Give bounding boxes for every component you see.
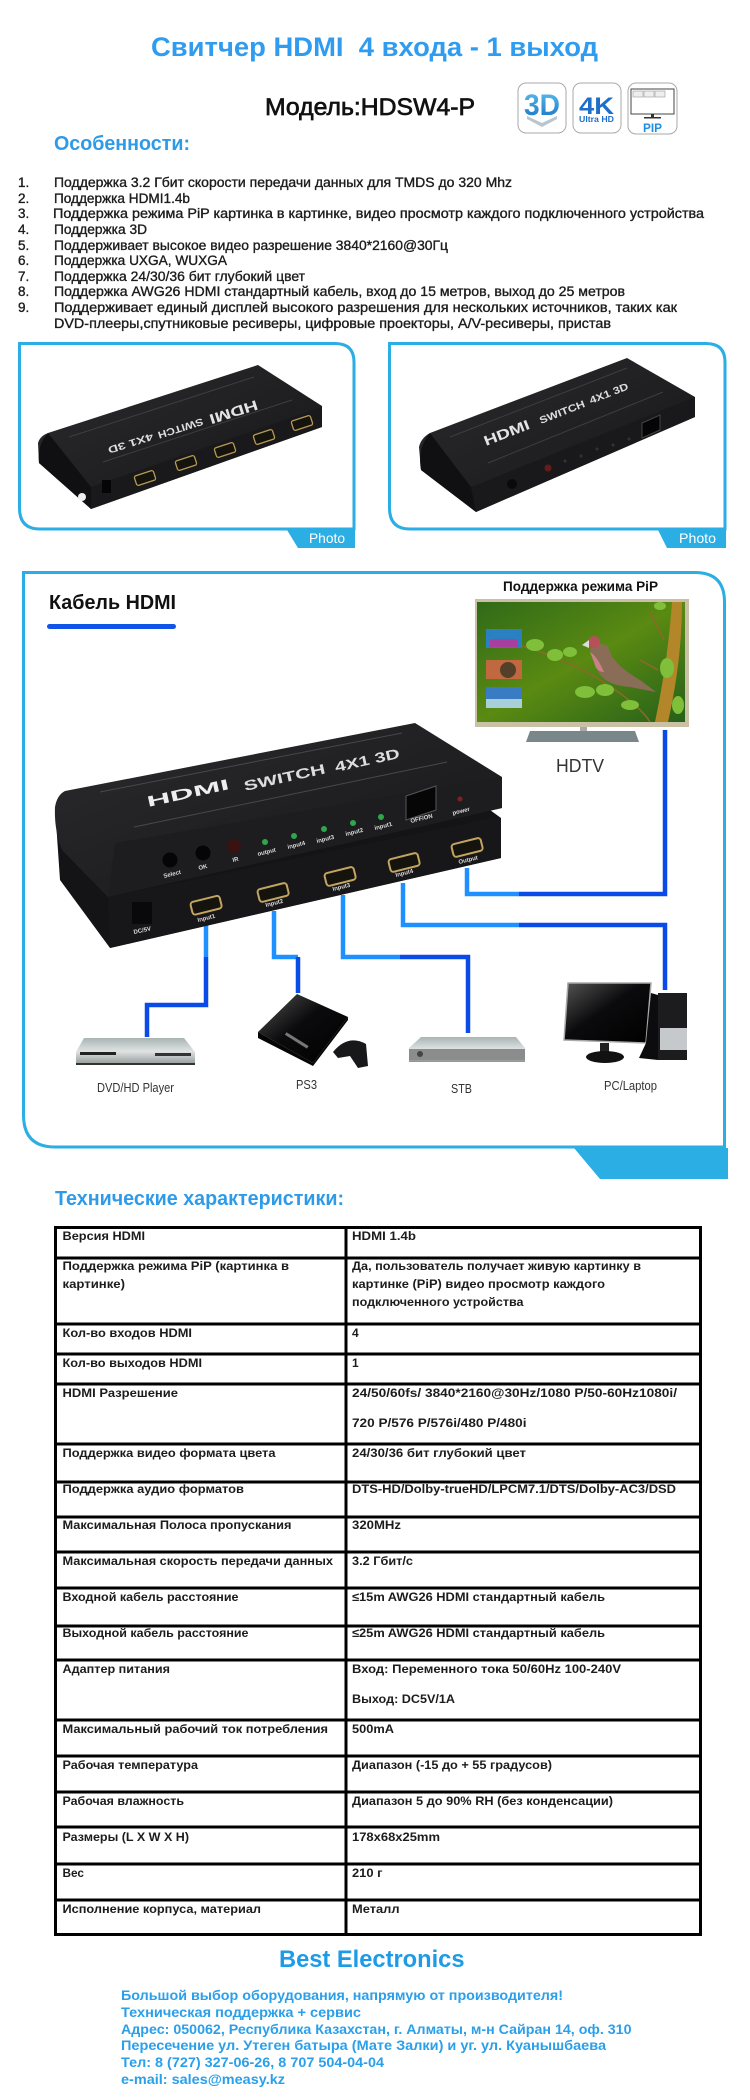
icon: 3D: 3D bbox=[524, 89, 560, 122]
cables bbox=[147, 730, 665, 1037]
upper unit: Select bbox=[163, 870, 182, 880]
heading: specifications: Технические характеристики: bbox=[55, 1188, 344, 1210]
upper unit: input2 bbox=[345, 828, 365, 838]
table text: parameters: Максимальная Полоса пропускания bbox=[62, 1518, 292, 1532]
table text: parameters: Размеры (L X W X H) bbox=[62, 1830, 189, 1844]
table text: values: 178x68x25mm bbox=[352, 1830, 440, 1844]
lower unit: Input3 bbox=[332, 883, 352, 893]
label: DVD/HD Player: DVD/HD Player bbox=[97, 1080, 175, 1095]
photo: switch rear: SWITCH bbox=[156, 415, 204, 440]
icon: PIP: PIP bbox=[643, 123, 662, 135]
table text: parameters: Кол-во выходов HDMI bbox=[62, 1356, 202, 1370]
table text: parameters: Выходной кабель расстояние bbox=[62, 1626, 249, 1640]
tab: photo 1 label bbox=[287, 530, 355, 548]
features list: Поддерживает единый дисплей высокого разрешения для нескольких источников, таких как bbox=[54, 300, 677, 315]
features list: 8. bbox=[18, 284, 29, 299]
label: HDTV: HDTV bbox=[556, 756, 604, 776]
model number: Модель:HDSW4-P bbox=[265, 94, 475, 121]
icon: 3D bbox=[518, 83, 566, 133]
upper unit: HDMI bbox=[145, 776, 231, 811]
table text: values: 500mA bbox=[352, 1722, 394, 1736]
table text: values: Диапазон (-15 до + 55 градусов) bbox=[352, 1758, 552, 1772]
features list: Поддержка 24/30/36 бит глубокий цвет bbox=[54, 269, 305, 284]
photo: switch front: 4X1 3D bbox=[588, 382, 630, 407]
table text: parameters: Поддержка аудио форматов bbox=[62, 1482, 244, 1496]
table text: parameters: картинке) bbox=[62, 1277, 125, 1291]
table text: values bbox=[352, 1229, 678, 1916]
table text: values: DTS-HD/Dolby-trueHD/LPCM7.1/DTS/Dolby-AC3/DSD bbox=[352, 1482, 676, 1496]
specifications table bbox=[55, 1227, 701, 1935]
features list: Поддержка HDMI1.4b bbox=[54, 191, 190, 206]
icon: PIP bbox=[628, 83, 677, 135]
features list: Поддержка AWG26 HDMI стандартный кабель, вход до 15 метров, выход до 25 метров bbox=[54, 284, 625, 299]
table text: values: 720 P/576 P/576i/480 P/480i bbox=[352, 1416, 526, 1430]
table text: values: 24/50/60fs/ 3840*2160@30Hz/1080 P/50-60Hz1080i/ bbox=[352, 1386, 678, 1400]
heading: HDMI cable: Кабель HDMI bbox=[49, 592, 176, 614]
table text: parameters: Входной кабель расстояние bbox=[62, 1590, 239, 1604]
table text: values: HDMI 1.4b bbox=[352, 1229, 416, 1243]
table text: values: 4 bbox=[352, 1326, 359, 1340]
table text: parameters: Максимальный рабочий ток потребления bbox=[62, 1722, 328, 1736]
lower unit: Input4 bbox=[395, 869, 415, 879]
table text: parameters: Максимальная скорость передачи данных bbox=[62, 1554, 333, 1568]
upper unit: input3 bbox=[316, 835, 336, 845]
table text: values: Вход: Переменного тока 50/60Hz 100-240V bbox=[352, 1662, 621, 1676]
features list: Поддержка 3.2 Гбит скорости передачи данных для TMDS до 320 Mhz bbox=[54, 175, 512, 190]
icon: TV bbox=[475, 599, 689, 742]
device: DVD player bbox=[76, 1038, 195, 1065]
table text: parameters: Поддержка режима PiP (картинка в bbox=[62, 1259, 289, 1273]
features list: 5. bbox=[18, 238, 29, 253]
tab: photo 2 label: Photo bbox=[679, 530, 716, 546]
footer contact details: e-mail: sales@measy.kz bbox=[121, 2072, 285, 2087]
heading: features: Особенности: bbox=[54, 133, 190, 155]
table text: values: картинке (PiP) видео просмотр каждого bbox=[352, 1277, 605, 1291]
panel: photo 1 bbox=[20, 344, 355, 548]
table text: values: Выход: DC5V/1A bbox=[352, 1692, 455, 1706]
upper unit: input1 bbox=[374, 822, 394, 832]
photo: switch rear: HDMI bbox=[207, 397, 260, 428]
features list: Поддержка режима PiP картинка в картинке, видео просмотр каждого подключенного устройства bbox=[53, 206, 705, 221]
footer contact details: Адрес: 050062, Республика Казахстан, г. Алматы, м-н Сайран 14, оф. 310 bbox=[121, 2022, 632, 2037]
upper unit: OK bbox=[198, 864, 209, 872]
table text: parameters bbox=[62, 1229, 333, 1916]
panel: photo 2 bbox=[390, 344, 726, 548]
table text: values: Да, пользователь получает живую картинку в bbox=[352, 1259, 641, 1273]
title: Свитчер HDMI 4 входа - 1 выход bbox=[151, 32, 598, 62]
table text: parameters: Адаптер питания bbox=[62, 1662, 170, 1676]
PiP caption: Поддержка режима PiP bbox=[503, 579, 658, 594]
footer heading: Best Electronics bbox=[279, 1946, 464, 1973]
photo: switch front bbox=[419, 358, 695, 512]
lower unit: Input2 bbox=[265, 899, 285, 909]
table text: values: ≤15m AWG26 HDMI стандартный кабель bbox=[352, 1590, 605, 1604]
features list: 3. bbox=[18, 206, 29, 221]
features list: Поддерживает высокое видео разрешение 3840*2160@30Гц bbox=[54, 238, 448, 253]
lower unit: Input1 bbox=[197, 914, 217, 924]
lower unit bbox=[108, 817, 501, 948]
features list bbox=[18, 175, 705, 331]
table text: parameters: Кол-во входов HDMI bbox=[62, 1326, 192, 1340]
table text: values: 24/30/36 бит глубокий цвет bbox=[352, 1446, 526, 1460]
table text: parameters: Версия HDMI bbox=[62, 1229, 145, 1243]
features list: 6. bbox=[18, 253, 29, 268]
table text: values: Металл bbox=[352, 1902, 400, 1916]
device: HDMI switch bbox=[55, 723, 502, 948]
tab: diagram corner bbox=[574, 1148, 728, 1179]
features list: 9. bbox=[18, 300, 29, 315]
icon: 4K Ultra HD: Ultra HD bbox=[579, 114, 614, 124]
table text: parameters: Поддержка видео формата цвета bbox=[62, 1446, 276, 1460]
photo: switch front: SWITCH bbox=[538, 399, 587, 427]
features list: Поддержка 3D bbox=[54, 222, 147, 237]
table text: values: 1 bbox=[352, 1356, 359, 1370]
features list: 1. bbox=[18, 175, 29, 190]
tab: photo 1 label: Photo bbox=[309, 530, 345, 546]
footer contact details: Пересечение ул. Утеген батыра (Мате Залки) и уг. ул. Куанышбаева bbox=[121, 2038, 607, 2053]
table text: parameters: Рабочая температура bbox=[62, 1758, 198, 1772]
features list: 7. bbox=[18, 269, 29, 284]
panel: connection diagram bbox=[24, 572, 728, 1179]
lower unit: Output bbox=[458, 855, 479, 866]
photo: switch rear bbox=[38, 365, 322, 509]
device: PS3 console bbox=[258, 994, 368, 1068]
table text: parameters: HDMI Разрешение bbox=[62, 1386, 178, 1400]
footer contact details bbox=[121, 1988, 632, 2087]
features list: 2. bbox=[18, 191, 29, 206]
table text: values: 320MHz bbox=[352, 1518, 401, 1532]
table text: values: ≤25m AWG26 HDMI стандартный кабель bbox=[352, 1626, 605, 1640]
upper unit bbox=[55, 723, 502, 897]
upper unit: output bbox=[257, 848, 277, 858]
footer contact details: Тел: 8 (727) 327-06-26, 8 707 504-04-04 bbox=[121, 2055, 385, 2070]
upper unit: input4 bbox=[287, 841, 307, 851]
table text: values: подключенного устройства bbox=[352, 1295, 524, 1309]
label: PC/Laptop: PC/Laptop bbox=[604, 1078, 657, 1093]
upper unit: power bbox=[452, 807, 471, 817]
features list: DVD-плееры,спутниковые ресиверы, цифровые проекторы, A/V-ресиверы, пристав bbox=[54, 316, 611, 331]
features list: Поддержка UXGA, WUXGA bbox=[54, 253, 227, 268]
upper unit: OFF/ON bbox=[410, 814, 433, 825]
device: PC bbox=[564, 983, 687, 1063]
upper unit: SWITCH bbox=[242, 760, 327, 794]
device: set-top box bbox=[409, 1037, 525, 1062]
label: STB: STB bbox=[451, 1081, 472, 1096]
photo: switch front: HDMI bbox=[481, 416, 532, 449]
table text: parameters: Исполнение корпуса, материал bbox=[62, 1902, 261, 1916]
table text: parameters: Рабочая влажность bbox=[62, 1794, 184, 1808]
device silhouette bbox=[55, 807, 501, 948]
table text: values: 210 г bbox=[352, 1866, 382, 1880]
features list: 4. bbox=[18, 222, 29, 237]
table text: parameters: Вес bbox=[62, 1866, 84, 1880]
icon: 4K Ultra HD: 4K bbox=[579, 93, 615, 120]
upper unit: 4X1 3D bbox=[333, 745, 401, 775]
photo: switch rear: 4X1 3D bbox=[106, 430, 154, 455]
footer contact details: Большой выбор оборудования, напрямую от производителя! bbox=[121, 1988, 563, 2003]
footer contact details: Техническая поддержка + сервис bbox=[121, 2005, 362, 2020]
icon: 4K Ultra HD bbox=[573, 83, 621, 133]
upper unit: IR bbox=[232, 857, 240, 864]
table text: values: Диапазон 5 до 90% RH (без конденсации) bbox=[352, 1794, 613, 1808]
lower unit: DC/5V bbox=[133, 926, 152, 936]
label: PS3: PS3 bbox=[296, 1077, 317, 1092]
table text: values: 3.2 Гбит/с bbox=[352, 1554, 413, 1568]
tab: photo 2 label bbox=[658, 530, 726, 548]
heading: HDMI cable bbox=[47, 592, 176, 629]
